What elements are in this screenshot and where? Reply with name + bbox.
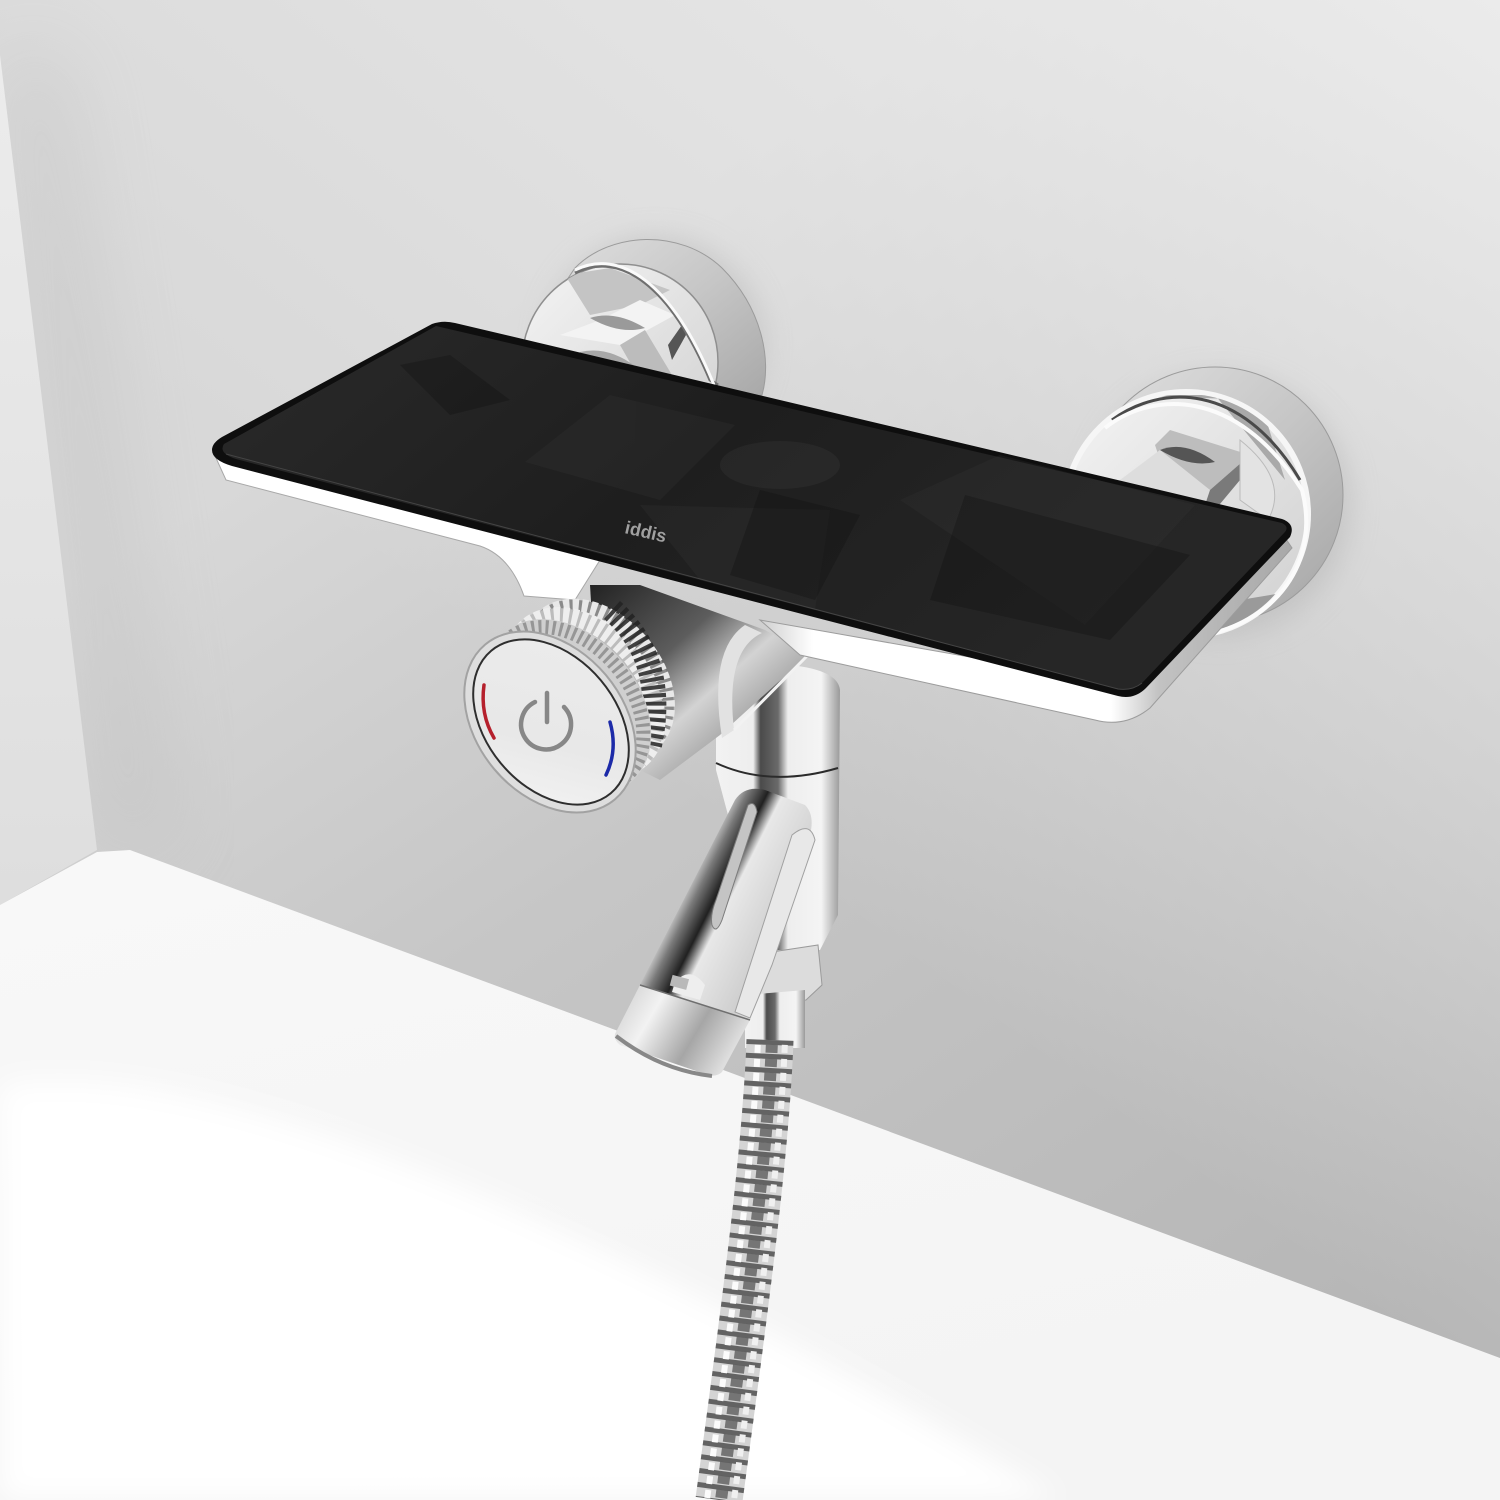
logo: iddis xyxy=(623,517,669,546)
knob face xyxy=(441,609,661,835)
mount front plate xyxy=(522,264,718,460)
body cradle highlight xyxy=(718,625,762,738)
column nut xyxy=(750,945,822,1005)
mount front plate xyxy=(1064,392,1308,636)
shower handle xyxy=(640,789,812,1020)
mount cylinder xyxy=(1087,367,1343,623)
shower slot reflection xyxy=(712,804,757,929)
mount chrome reflections xyxy=(1120,395,1285,629)
hand shower xyxy=(615,789,815,1076)
shelf underside chrome strip xyxy=(760,530,1292,722)
cold marker xyxy=(606,722,613,775)
shower cradle xyxy=(735,829,815,1018)
chrome shelf bracket left xyxy=(216,458,600,600)
mount highlight ring xyxy=(1112,397,1300,480)
left wall mount xyxy=(524,233,766,396)
mixer column xyxy=(716,665,840,1048)
temperature knob xyxy=(429,570,705,846)
knurled collar xyxy=(451,570,705,828)
shelf top surface xyxy=(222,326,1287,689)
hot marker xyxy=(483,685,494,738)
mount highlight ring xyxy=(575,266,718,385)
mount shadow xyxy=(547,237,763,453)
shelf reflections xyxy=(525,395,1195,625)
shelf edge highlight xyxy=(226,454,1142,689)
shower hose xyxy=(707,1040,785,1500)
bathtub xyxy=(0,850,1500,1500)
icon: power symbol xyxy=(521,693,571,749)
mixer body cylinder xyxy=(590,585,808,780)
column joint line xyxy=(716,763,838,777)
shower head xyxy=(615,985,750,1076)
mount chrome reflections xyxy=(560,268,686,385)
left side wall xyxy=(0,55,97,905)
glass shelf xyxy=(212,322,1292,697)
knob bezel xyxy=(429,598,671,846)
mount shadow xyxy=(1090,375,1350,635)
mount cylinder xyxy=(540,239,766,420)
tub inner basin glow xyxy=(12,1102,1002,1490)
right wall mount xyxy=(1064,367,1350,638)
